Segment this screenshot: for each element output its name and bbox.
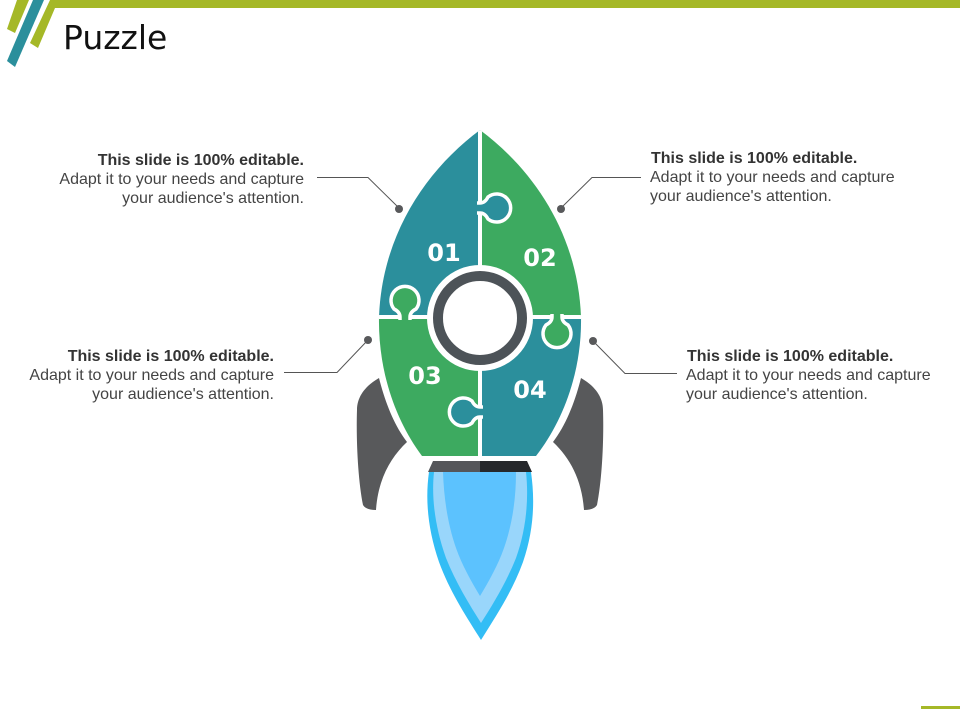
text block: top left: your audience's attention.: [122, 190, 304, 207]
leader line: middle left: [284, 336, 372, 372]
text block: top right: This slide is 100% editable.: [651, 150, 857, 167]
text block: top left: Adapt it to your needs and capture: [59, 171, 304, 188]
number labels: 01: [427, 239, 461, 267]
title: Puzzle: [63, 18, 167, 57]
text block: middle right: Adapt it to your needs and capture: [686, 367, 931, 384]
number labels: [408, 239, 557, 404]
fin: left: [357, 378, 407, 510]
leader line: middle right: [589, 337, 677, 374]
text block: middle right: [686, 348, 931, 403]
fin: right: [553, 378, 603, 510]
piece 01: [379, 130, 480, 316]
text block: middle left: your audience's attention.: [92, 386, 274, 403]
text block: top right: Adapt it to your needs and capture: [650, 169, 895, 186]
text block: top left: [59, 152, 304, 207]
leader line: top left: [317, 178, 403, 213]
number labels: 04: [513, 376, 547, 404]
leader line: top right: [557, 178, 641, 213]
flame: [427, 472, 533, 640]
text block: middle right: your audience's attention.: [686, 386, 868, 403]
text block: top left: This slide is 100% editable.: [98, 152, 304, 169]
puzzle body: [378, 130, 582, 456]
text block: top right: your audience's attention.: [650, 188, 832, 205]
piece 02: [480, 130, 581, 316]
text block: middle left: [29, 348, 274, 403]
number labels: 03: [408, 362, 442, 390]
number labels: 02: [523, 244, 557, 272]
text block: middle right: This slide is 100% editable.: [687, 348, 893, 365]
engine nozzle: [428, 461, 532, 472]
text block: middle left: This slide is 100% editable.: [68, 348, 274, 365]
rocket illustration: [284, 130, 677, 640]
text block: middle left: Adapt it to your needs and capture: [29, 367, 274, 384]
text block: top right: [650, 150, 895, 205]
piece 04: [482, 318, 582, 456]
porthole ring: [427, 265, 533, 371]
piece 03: [378, 318, 478, 456]
